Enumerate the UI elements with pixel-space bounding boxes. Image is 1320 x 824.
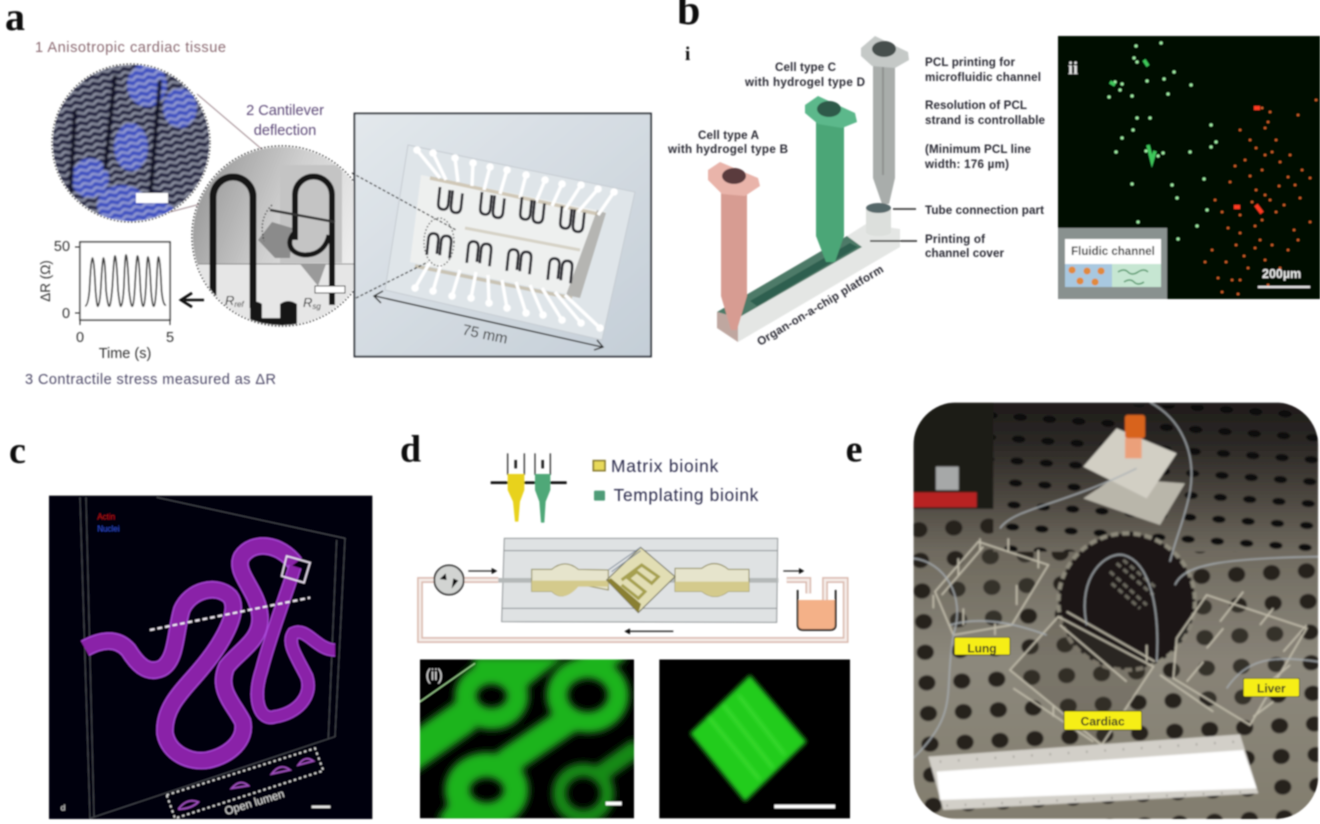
line chart: delta R over time: Time (s) <box>99 346 151 362</box>
panel label e: e <box>846 429 863 471</box>
circle: cantilever close-up: ref <box>234 300 245 309</box>
annotation block: Resolution of PCL <box>925 99 1027 112</box>
lumen cross sections <box>178 759 313 809</box>
line chart: delta R over time: 0 <box>76 330 84 346</box>
upper shelf holes <box>993 405 1320 552</box>
label open lumen: Open lumen <box>223 788 286 818</box>
panel: a <box>5 0 651 388</box>
annotation block: channel cover <box>925 247 1004 260</box>
panel: b <box>667 0 1320 349</box>
annotation block: (Minimum PCL line <box>925 143 1032 156</box>
panel: e <box>913 402 1320 822</box>
annotation block: Tube connection part <box>925 204 1044 217</box>
micrograph ii <box>1058 36 1320 299</box>
diamond chamber <box>607 547 675 613</box>
label: lung: Lung <box>967 641 997 655</box>
channels <box>532 564 608 596</box>
dimension label: 75 mm <box>461 322 509 348</box>
central dark reservoir <box>1058 533 1195 670</box>
glass box outline <box>80 497 345 818</box>
inset: fluidic channel: Fluidic channel <box>1071 246 1155 258</box>
label: cell type C: Cell type C <box>775 61 837 74</box>
legend actin: Actin <box>97 512 115 521</box>
inset: fluidic channel <box>1058 228 1167 299</box>
label: hydrogel D: with hydrogel type D <box>744 76 865 89</box>
label: lung <box>954 637 1010 655</box>
rotated label: platform: Organ-on-a-chip platform <box>755 263 886 349</box>
lung chamber <box>933 538 1048 635</box>
scale bar <box>606 802 622 805</box>
annotation block: width: 176 µm) <box>924 158 1009 171</box>
cardiac chamber <box>1010 612 1155 745</box>
annotation block: PCL printing for <box>925 56 1015 69</box>
scale bar <box>1258 286 1310 288</box>
reservoir <box>798 590 836 630</box>
bioreactor chip <box>498 538 778 622</box>
sensors <box>427 187 585 283</box>
tubing <box>913 402 1318 758</box>
corner mark d: d <box>61 803 66 813</box>
dual bioink syringes <box>491 453 567 523</box>
red object <box>913 492 977 507</box>
green fluorescent cells <box>1109 43 1216 242</box>
flow arrows <box>468 571 802 631</box>
arrow: circle to chart <box>181 293 204 307</box>
selection square <box>282 556 310 583</box>
purple tube second segment glow <box>257 567 335 717</box>
upper white plates <box>1083 428 1185 525</box>
lower shelf holes <box>913 508 1318 822</box>
legend: templating: Templating bioink <box>614 485 759 505</box>
purple tube glow <box>85 546 295 761</box>
line chart: delta R over time: 50 <box>54 239 70 255</box>
liver chamber <box>1160 592 1307 725</box>
red fluorescent cells <box>1205 100 1316 294</box>
metal object <box>936 467 959 490</box>
dimension arrow 75 mm <box>374 291 603 350</box>
sub label ii: ii <box>1068 58 1078 78</box>
line chart: delta R over time: ΔR (Ω) <box>38 260 53 302</box>
annotation block: Printing of <box>925 233 985 246</box>
panel: d <box>400 429 863 824</box>
circle: cantilever close-up: R <box>225 293 234 308</box>
scale label 200 um: 200µm <box>1262 267 1301 281</box>
perfusion loop tubing core <box>420 580 846 640</box>
micrograph: vascular network <box>418 658 636 820</box>
label: cardiac <box>1064 711 1142 730</box>
text: deflection: deflection <box>254 123 316 139</box>
line chart: delta R over time <box>38 239 174 362</box>
legend: matrix: Matrix bioink <box>611 456 719 476</box>
dashed cross-section line <box>150 598 310 630</box>
circle outline <box>192 146 372 326</box>
dashed zoom lines <box>352 173 456 298</box>
line chart: delta R over time: 0 <box>62 306 70 322</box>
circle: cardiac tissue micrograph <box>50 62 212 225</box>
purple tube core <box>85 546 295 761</box>
photo: multi-organ platform <box>913 402 1320 822</box>
label: liver <box>1243 678 1299 697</box>
label: cardiac: Cardiac <box>1081 714 1125 728</box>
purple tube second segment core <box>257 567 335 717</box>
panel label d: d <box>400 429 421 471</box>
label ii: (ii) <box>426 667 443 684</box>
micrograph: green square <box>659 659 850 818</box>
annotation block <box>924 56 1046 260</box>
circle: zoom source on chip <box>424 218 454 266</box>
ruler <box>928 734 1258 810</box>
syringe: green <box>805 96 857 262</box>
label: liver: Liver <box>1257 681 1286 695</box>
panel label c: c <box>9 430 26 472</box>
scale bar <box>312 806 330 808</box>
orange connector <box>1125 415 1145 458</box>
pointer lines <box>870 209 917 241</box>
syringe: gray <box>861 36 909 204</box>
caption: contractile stress: 3 Contractile stress measured as ΔR <box>25 372 276 388</box>
flow arrow heads <box>492 568 804 634</box>
syringe: pink <box>708 162 760 330</box>
circle: cantilever close-up: sg <box>312 302 321 311</box>
micrograph: serpentine tube <box>49 496 372 819</box>
sub label i: i <box>685 44 690 65</box>
circle outline <box>52 64 210 222</box>
annotation block: strand is controllable <box>925 114 1046 127</box>
circle: cantilever close-up: R <box>303 295 312 310</box>
legend nuclei: Nuclei <box>97 525 120 534</box>
perfusion loop tubing <box>420 580 846 640</box>
platform <box>717 224 900 342</box>
label: cell type A: Cell type A <box>698 129 760 142</box>
circle: cantilever close-up <box>192 146 354 326</box>
pump <box>434 565 464 595</box>
tube connection part <box>866 203 891 236</box>
reservoir grid <box>1110 560 1157 608</box>
line chart: delta R over time: 5 <box>166 330 174 346</box>
label: hydrogel B: with hydrogel type B <box>667 143 788 156</box>
dark left backdrop <box>913 402 993 509</box>
annotation block: microfluidic channel <box>925 71 1041 84</box>
panel: c <box>9 430 372 819</box>
dashed box: open lumen <box>167 748 323 818</box>
text: cantilever deflection: 2 Cantilever <box>246 103 324 119</box>
photo: 8-well chip <box>354 114 651 356</box>
white electrode traces <box>415 150 614 328</box>
heading: anisotropic cardiac tissue: 1 Anisotropic cardiac tissue <box>35 40 226 56</box>
connector lines between circles <box>170 94 292 212</box>
